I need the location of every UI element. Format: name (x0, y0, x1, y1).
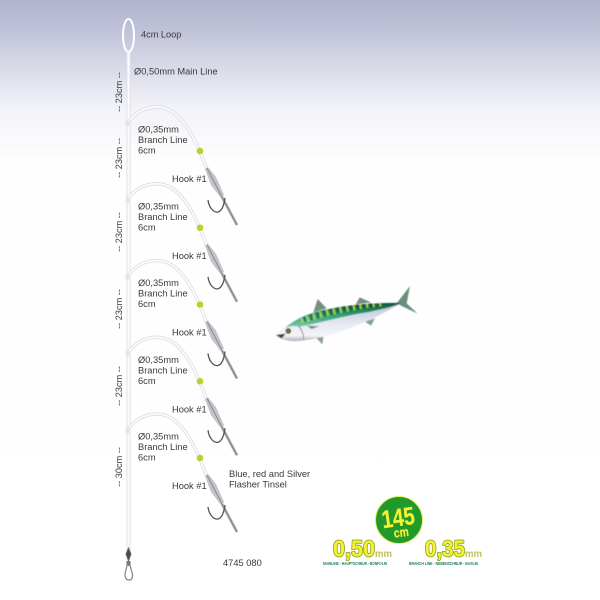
branch rig 2: Ø0,35mm (138, 201, 179, 211)
branch rig 5: Hook #1 (172, 481, 207, 491)
branch rig 1 (126, 107, 237, 225)
length marker: 23cm: -- 23cm -- (114, 138, 124, 178)
branch rig 1: Ø0,35mm (138, 124, 179, 134)
spec: branch line diameter: mm (465, 549, 482, 560)
body (276, 303, 402, 341)
fish illustration (276, 286, 418, 344)
branch rig 5 (126, 414, 237, 532)
branch rig 2 (126, 184, 237, 302)
length marker: 23cm: -- 23cm -- (114, 366, 124, 406)
branch rig 1: 6cm (138, 146, 156, 156)
spec: main line diameter: mm (375, 549, 392, 560)
branch rig 4: Hook #1 (172, 404, 207, 414)
branch rig 2: 6cm (138, 222, 156, 232)
branch rig 1: Branch Line (138, 135, 188, 145)
fins (313, 299, 327, 312)
branch rig 4: Branch Line (138, 365, 188, 375)
product code: 4745 080 (223, 558, 262, 568)
branch rig 4 (126, 337, 237, 455)
branch rig 3 (126, 260, 237, 378)
gill and eye (298, 326, 304, 339)
spec: main line diameter: 0,50 (333, 536, 375, 562)
branch rig 2: Hook #1 (172, 251, 207, 261)
main line with loop (123, 19, 134, 550)
length marker: 23cm: -- 23cm -- (114, 212, 124, 252)
branch rig 1: Hook #1 (172, 174, 207, 184)
badge: 145 cm (376, 496, 422, 544)
length marker: 30cm: -- 30cm -- (114, 447, 124, 487)
branch rig 4: Ø0,35mm (138, 355, 179, 365)
back (285, 303, 402, 328)
tinsel note (229, 469, 310, 490)
badge: 145 cm: cm (393, 524, 410, 541)
spec: branch line diameter (409, 536, 482, 566)
branch rig 2: Branch Line (138, 212, 188, 222)
tinsel note: Blue, red and Silver (229, 469, 310, 479)
stripes (301, 303, 381, 323)
branch rig 3: Hook #1 (172, 328, 207, 338)
branch rig 3: Branch Line (138, 288, 188, 298)
icon: swivel and snap (125, 548, 133, 580)
length marker: 23cm: -- 23cm -- (114, 289, 124, 329)
branch rig 3: 6cm (138, 299, 156, 309)
branch rig 4: 6cm (138, 376, 156, 386)
spec: branch line diameter: 0,35 (425, 536, 465, 562)
label: main line: Ø0,50mm Main Line (134, 66, 218, 76)
spec: main line diameter: MAINLINE - HAUPTSCHNUR - BONFOLIN (323, 561, 387, 566)
tinsel note: Flasher Tinsel (229, 480, 287, 490)
badge: 145 cm: 145 (380, 502, 417, 534)
spec: branch line diameter: BRANCH LINE - NEBENSCHNUR - BASLIN (409, 561, 478, 566)
branch rig 5: 6cm (138, 452, 156, 462)
length marker: 23cm: -- 23cm -- (114, 72, 124, 112)
branch rig 5: Ø0,35mm (138, 432, 179, 442)
branch rig 3: Ø0,35mm (138, 278, 179, 288)
label: 4cm loop: 4cm Loop (141, 30, 181, 40)
spec: main line diameter (323, 536, 392, 566)
branch rig 5: Branch Line (138, 442, 188, 452)
